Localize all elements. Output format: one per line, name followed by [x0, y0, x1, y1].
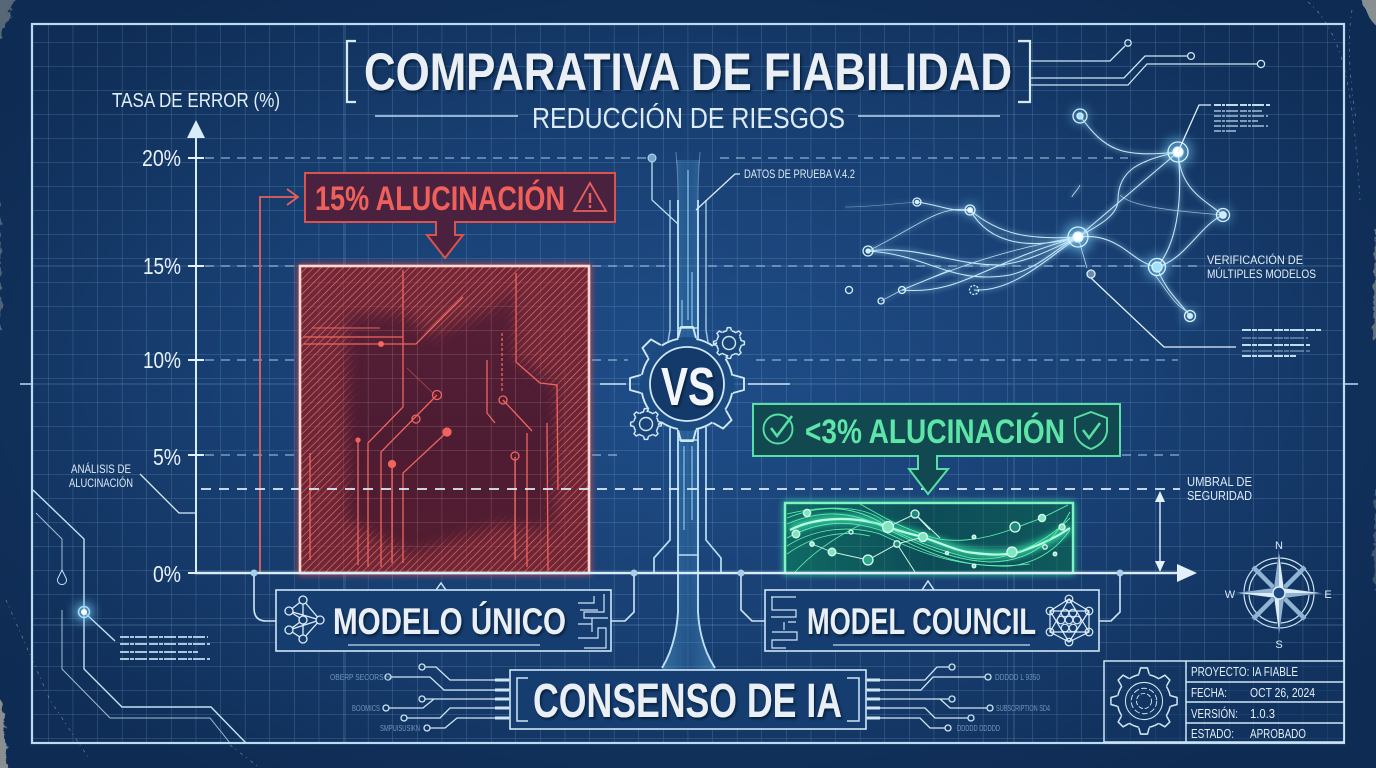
icon: small gear bottom	[631, 409, 661, 439]
y tick labels: 5%	[153, 444, 181, 470]
right circuit labels	[957, 673, 1050, 733]
icon: gear with maze	[1111, 668, 1177, 734]
title text: COMPARATIVA DE FIABILIDAD	[364, 43, 1012, 102]
y tick labels: 10%	[143, 347, 181, 373]
test data label	[696, 169, 855, 210]
icon: maze	[578, 594, 608, 648]
block text: PROYECTO: IA FIABLE	[1191, 665, 1298, 679]
hallucination analysis label: ANÁLISIS DE	[71, 463, 131, 476]
icon: compass	[1225, 540, 1332, 651]
network links	[845, 116, 1223, 316]
block text: 1.0.3	[1250, 707, 1275, 721]
y tick labels	[142, 145, 181, 587]
red pointer line	[260, 189, 298, 573]
network diagram	[845, 109, 1230, 322]
left circuit labels	[330, 673, 420, 733]
left circuit labels: SMPUISUSIKN	[380, 724, 420, 733]
green nodes	[792, 509, 1065, 568]
icon: neural network	[285, 596, 324, 643]
green network waves	[787, 504, 1070, 572]
right circuit labels: SUBSCRIPTION SD4	[996, 704, 1050, 713]
pillar	[662, 160, 715, 670]
verification label	[1207, 252, 1316, 281]
callout text: 15% ALUCINACIÓN	[315, 180, 565, 218]
red circuit traces	[303, 270, 558, 570]
callout: 3%	[753, 404, 1120, 494]
micro text block: top right	[1214, 105, 1270, 131]
title block	[1104, 661, 1344, 742]
y tick labels: 0%	[153, 561, 181, 587]
y tick labels: 15%	[143, 253, 181, 279]
VS text: VS	[661, 357, 715, 417]
panel: model council	[741, 576, 1120, 651]
x axis	[195, 564, 1197, 582]
block text: ESTADO:	[1191, 727, 1234, 741]
compass letters: N	[1275, 540, 1283, 552]
icon: check circle	[764, 414, 792, 444]
left circuit labels: BOOMICS	[352, 704, 380, 713]
hallucination analysis label: ALUCINACIÓN	[69, 477, 133, 490]
modelo unico text: MODELO ÚNICO	[333, 600, 566, 642]
y axis	[187, 120, 205, 573]
verification label: VERIFICACIÓN DE	[1207, 252, 1303, 267]
block text: VERSIÓN:	[1191, 706, 1238, 721]
panel: modelo unico	[254, 576, 634, 651]
verification label: MÚLTIPLES MODELOS	[1207, 266, 1316, 281]
threshold label: UMBRAL DE	[1187, 474, 1252, 489]
left circuit labels: OBERP SECORS S	[330, 673, 390, 682]
micro text block: left	[120, 637, 210, 659]
icon: council network	[1046, 595, 1093, 646]
block text	[1191, 665, 1315, 741]
hallucination analysis label	[69, 463, 196, 513]
title brackets	[347, 41, 1030, 102]
panel: green bar	[783, 501, 1075, 575]
VS gear badge	[630, 327, 744, 441]
icon: warning	[574, 183, 606, 211]
consensus text: CONSENSO DE IA	[533, 675, 842, 728]
network glow	[964, 109, 1230, 322]
block text: OCT 26, 2024	[1250, 686, 1315, 700]
center axis ticks	[600, 383, 790, 385]
green wave glow band	[790, 519, 1070, 555]
dashed reference lines	[205, 158, 1200, 455]
callout: 15%	[305, 173, 615, 258]
icon: shield	[1075, 412, 1107, 449]
threshold label: SEGURIDAD	[1187, 488, 1252, 503]
test data label: DATOS DE PRUEBA V.4.2	[744, 169, 855, 181]
panel: red bar	[298, 264, 591, 575]
right circuit labels: DDDDD DDDDD	[957, 724, 1000, 733]
network nodes	[846, 109, 1230, 322]
glowing left node	[76, 604, 92, 620]
y tick labels: 20%	[142, 145, 181, 171]
compass letters: E	[1324, 589, 1332, 601]
compass letters	[1225, 540, 1332, 651]
callout text: <3% ALUCINACIÓN	[805, 413, 1065, 451]
right consensus circuits	[866, 664, 993, 731]
model council text: MODEL COUNCIL	[807, 601, 1036, 642]
threshold range arrow	[1155, 491, 1165, 572]
safety threshold dashed line	[201, 488, 1180, 490]
consensus box	[510, 670, 866, 729]
right circuit labels: DDDDD L 9350	[995, 673, 1040, 682]
micro text block: right	[1242, 330, 1322, 356]
left circuits	[33, 490, 246, 743]
compass letters: W	[1225, 589, 1236, 601]
block text: FECHA:	[1191, 686, 1227, 700]
left consensus circuits	[383, 664, 510, 731]
subtitle: REDUCCIÓN DE RIESGOS	[532, 102, 845, 135]
title circuit traces	[1030, 40, 1265, 85]
icon: maze	[771, 597, 797, 648]
icon: small gear top	[714, 328, 744, 358]
block text: APROBADO	[1250, 727, 1306, 741]
title	[347, 41, 1030, 102]
compass letters: S	[1275, 639, 1283, 651]
chart axes	[112, 90, 280, 587]
network callout lines	[1091, 105, 1236, 347]
central column	[648, 152, 721, 670]
threshold label	[1187, 474, 1252, 503]
y axis title: TASA DE ERROR (%)	[112, 90, 280, 112]
